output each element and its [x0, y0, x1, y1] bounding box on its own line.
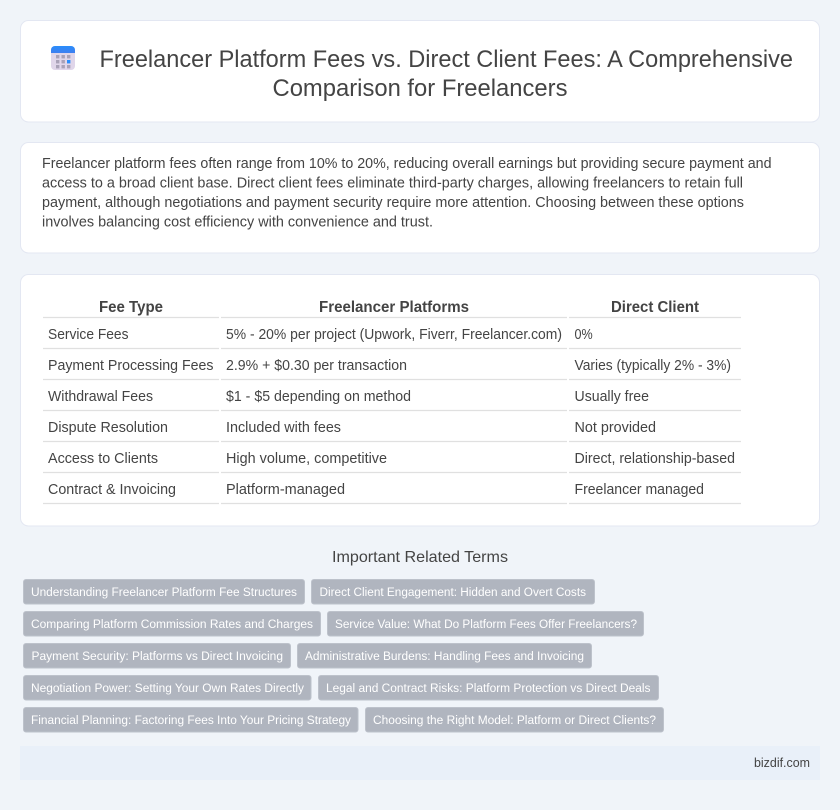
tag: choosing the right model: Choosing the Right Model: Platform or Direct Clients?: [373, 713, 656, 727]
tag: financial planning: [24, 708, 358, 732]
panel: fee comparison table: [20, 274, 820, 526]
footer: bizdif.com: [754, 755, 810, 770]
table header: [99, 299, 699, 316]
table row: service fees: Service Fees: [48, 327, 128, 343]
text block: summary: payment, although negotiations and payment security require more attention. Choosing between these options: [42, 195, 744, 211]
tag: fee structures: [24, 580, 304, 604]
table row: contract and invoicing: Contract & Invoicing: [48, 482, 176, 498]
tag: administrative burdens: [298, 644, 592, 668]
tag: legal and contract risks: [318, 676, 658, 700]
panel: title header: [20, 20, 820, 122]
table row: access to clients: Direct, relationship-based: [574, 451, 735, 467]
related term tags: [24, 580, 664, 732]
tag: negotiation power: [24, 676, 311, 700]
tag: administrative burdens: Administrative Burdens: Handling Fees and Invoicing: [305, 649, 584, 663]
table row: payment processing fees: Varies (typically 2% - 3%): [574, 358, 731, 374]
table row: service fees: [48, 326, 593, 343]
text block: summary: access to a broad client base. Direct client fees eliminate third-party charges, allowing freelancers to retain full: [42, 176, 743, 192]
tag: commission rates: [24, 612, 320, 636]
tag: direct client engagement: Direct Client Engagement: Hidden and Overt Costs: [320, 585, 586, 599]
table row: payment processing fees: 2.9% + $0.30 per transaction: [226, 358, 407, 374]
tag: commission rates: Comparing Platform Commission Rates and Charges: [31, 617, 313, 631]
tag: legal and contract risks: Legal and Contract Risks: Platform Protection vs Direct Deals: [326, 681, 650, 695]
table row: dispute resolution: Dispute Resolution: [48, 420, 168, 436]
text block: summary: Freelancer platform fees often range from 10% to 20%, reducing overall earnings but providing secure payment and: [42, 156, 772, 172]
text block: summary: [42, 156, 772, 230]
title: [100, 46, 793, 102]
table row: withdrawal fees: $1 - $5 depending on method: [226, 389, 411, 405]
table row: contract and invoicing: [48, 482, 704, 498]
tag: financial planning: Financial Planning: Factoring Fees Into Your Pricing Strategy: [31, 713, 352, 727]
table row: payment processing fees: Payment Processing Fees: [48, 358, 214, 374]
tag: choosing the right model: [366, 708, 664, 732]
table header: Fee Type: [99, 299, 163, 316]
tag: payment security: Payment Security: Platforms vs Direct Invoicing: [32, 649, 283, 663]
table header: Direct Client: [611, 299, 699, 316]
title: Comparison for Freelancers: [272, 75, 568, 102]
tag: direct client engagement: [312, 580, 594, 604]
table row: access to clients: High volume, competitive: [226, 451, 387, 467]
heading: important related terms: Important Related Terms: [332, 549, 508, 566]
table row: contract and invoicing: Platform-managed: [226, 482, 345, 498]
tag: negotiation power: Negotiation Power: Setting Your Own Rates Directly: [31, 681, 305, 695]
table header: Freelancer Platforms: [319, 299, 469, 316]
tag: service value: [328, 612, 644, 636]
footer: [20, 746, 820, 780]
text block: summary: involves balancing cost efficiency with convenience and trust.: [42, 214, 433, 230]
table row: access to clients: Access to Clients: [48, 451, 158, 467]
tag: service value: Service Value: What Do Platform Fees Offer Freelancers?: [335, 617, 637, 631]
tag: payment security: [24, 644, 290, 668]
tag: fee structures: Understanding Freelancer Platform Fee Structures: [31, 585, 297, 599]
title: Freelancer Platform Fees vs. Direct Client Fees: A Comprehensive: [100, 46, 793, 73]
table row: contract and invoicing: Freelancer managed: [574, 482, 704, 498]
table row: withdrawal fees: Withdrawal Fees: [48, 389, 153, 405]
table row: service fees: 0%: [574, 326, 593, 342]
table row: dispute resolution: Not provided: [574, 420, 656, 436]
icon: calendar: [51, 46, 75, 70]
table row: service fees: 5% - 20% per project (Upwork, Fiverr, Freelancer.com): [226, 327, 562, 343]
panel: summary paragraph: [20, 142, 820, 253]
table row: dispute resolution: [48, 420, 656, 436]
table row: withdrawal fees: [48, 389, 649, 405]
table row: withdrawal fees: Usually free: [574, 389, 649, 405]
table row: dispute resolution: Included with fees: [226, 420, 341, 436]
table row: payment processing fees: [48, 358, 731, 374]
table row: access to clients: [48, 451, 735, 467]
